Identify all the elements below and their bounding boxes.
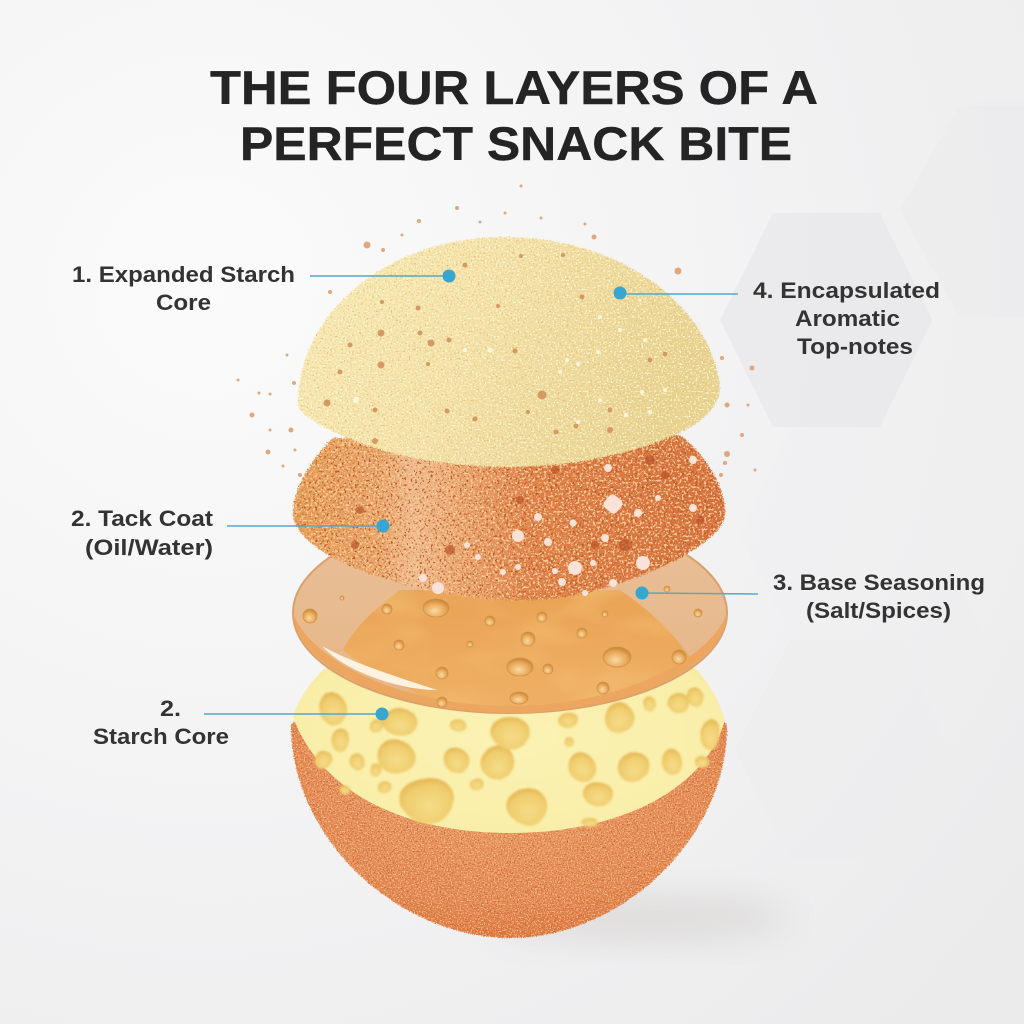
top dome orange flecks <box>324 253 668 444</box>
label text: Aromatic <box>795 306 900 331</box>
label text: 2. <box>160 696 181 721</box>
label text: 4. Encapsulated <box>753 278 940 303</box>
background hexagon pattern <box>720 0 1024 860</box>
leader line and marker <box>636 586 758 600</box>
title: PERFECT SNACK BITE <box>240 117 792 170</box>
layer: translucent oil/water film <box>293 513 727 713</box>
title <box>210 61 818 170</box>
label text: (Salt/Spices) <box>806 598 951 623</box>
gel texture under film <box>343 590 690 709</box>
leader line and marker <box>204 708 388 720</box>
label: tack coat <box>71 506 390 560</box>
label text <box>72 262 295 315</box>
layer: top aromatic dome <box>298 237 720 467</box>
flying seasoning particles <box>236 184 756 477</box>
label: encapsulated aromatic top-notes <box>614 278 940 359</box>
ground shadow <box>490 896 790 940</box>
starch core pores <box>314 688 720 828</box>
dark spice flecks <box>351 455 704 555</box>
label text <box>753 278 940 359</box>
label text: Core <box>156 290 211 315</box>
oil droplets <box>303 586 702 707</box>
glossy streak <box>322 646 437 690</box>
label text: (Oil/Water) <box>85 535 213 560</box>
label text <box>93 696 229 749</box>
leader line and marker <box>614 286 738 300</box>
film rim highlight <box>293 613 727 713</box>
label: expanded starch core <box>72 262 456 315</box>
label: base seasoning <box>636 570 985 623</box>
label text <box>71 506 214 560</box>
layered snack bite illustration <box>291 237 727 938</box>
label text <box>773 570 985 623</box>
layer: porous starch core <box>293 640 725 833</box>
label text: Top-notes <box>797 334 913 359</box>
salt crystals <box>419 456 697 596</box>
label text: Starch Core <box>93 724 229 749</box>
leader line and marker <box>310 270 456 282</box>
top dome white grains <box>353 298 667 424</box>
layer: orange base shell <box>291 706 727 938</box>
label text: 3. Base Seasoning <box>773 570 985 595</box>
layer: seasoning-coated dome <box>293 435 725 600</box>
label text: 1. Expanded Starch <box>72 262 295 287</box>
title: THE FOUR LAYERS OF A <box>210 61 818 114</box>
leader line and marker <box>227 520 390 532</box>
label text: 2. Tack Coat <box>71 506 214 531</box>
label: starch core <box>93 696 388 749</box>
